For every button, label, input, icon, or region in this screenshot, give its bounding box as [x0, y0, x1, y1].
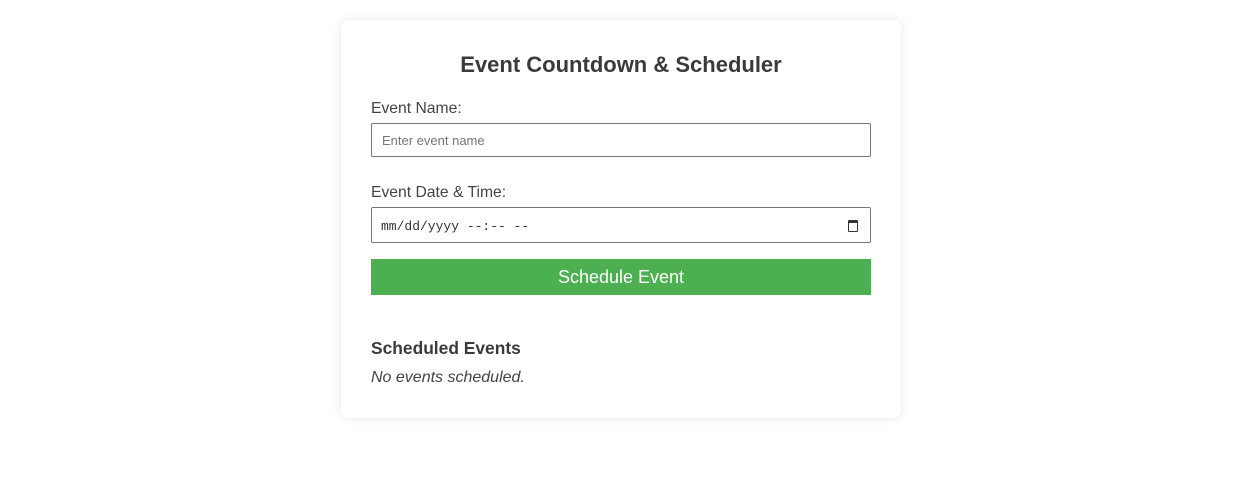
button: schedule event: Schedule Event [558, 267, 684, 287]
text: empty state: No events scheduled. [371, 369, 525, 386]
panel: scheduler card [341, 20, 901, 418]
heading: scheduled events: Scheduled Events [371, 338, 521, 358]
input: date time: mm/dd/yyyy --:-- -- [381, 219, 529, 234]
input: date time [371, 207, 871, 243]
label: event name: Event Name: [371, 100, 462, 117]
title: Event Countdown & Scheduler [460, 52, 782, 77]
input: event name [371, 123, 871, 157]
label: event date: Event Date & Time: [371, 184, 506, 201]
button: schedule event [371, 259, 871, 295]
input: event name: Enter event name [382, 133, 485, 148]
icon: calendar [848, 220, 858, 232]
